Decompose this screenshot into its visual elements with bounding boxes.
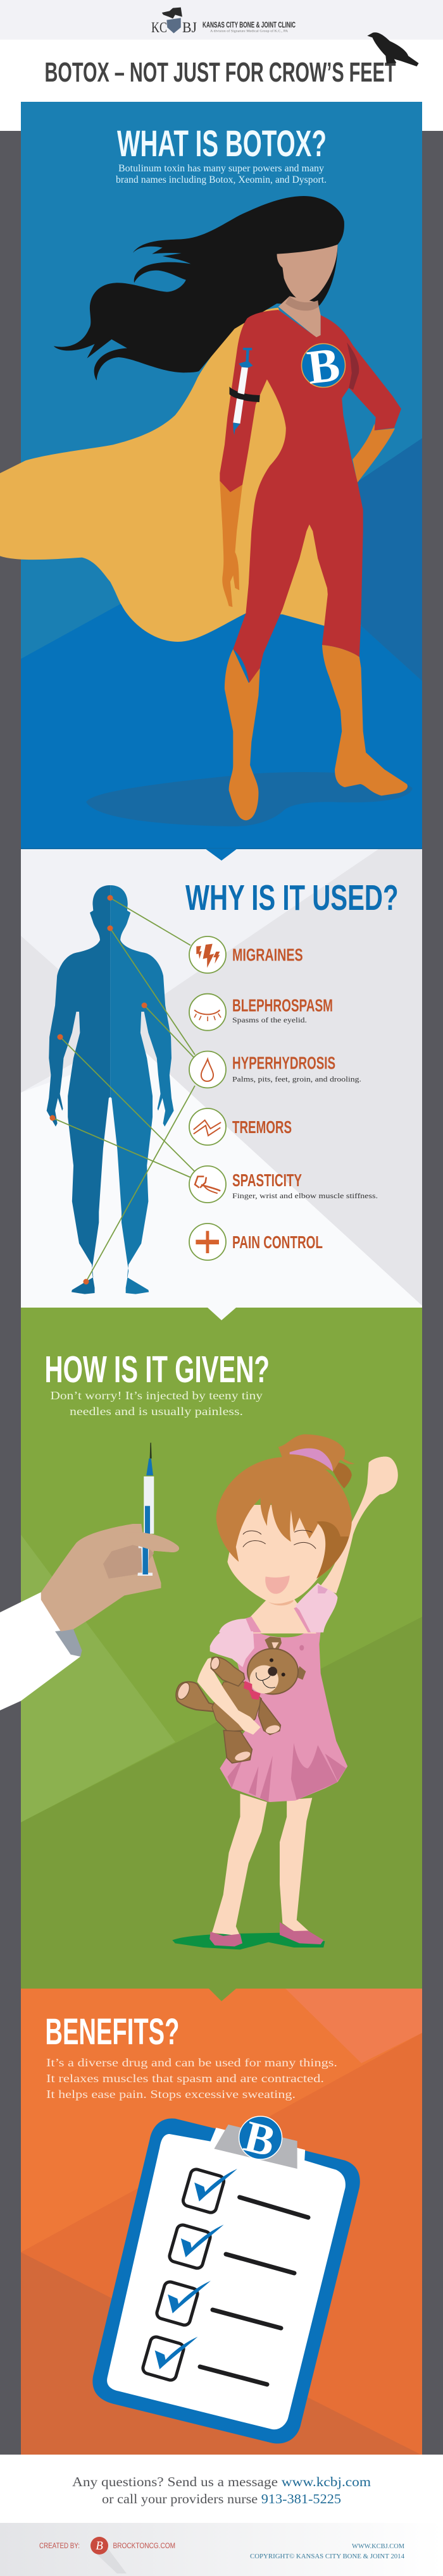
checkbox row 2	[168, 2224, 294, 2273]
brockton url: BROCKTONCG.COM	[113, 2541, 175, 2550]
bear upper arm	[211, 1657, 245, 1686]
bear top ear	[265, 1636, 282, 1652]
clip	[214, 2125, 297, 2169]
superhero figure	[0, 196, 413, 826]
panel: how is it given	[21, 1308, 422, 1989]
icon: KCBJ logo: KC	[151, 20, 167, 35]
icon: tremor zigzag	[194, 1120, 221, 1136]
arrow: green pointer	[209, 1989, 236, 2001]
bear torso	[212, 1682, 261, 1731]
text: injection: Don’t worry! It’s injected by teeny tiny	[51, 1389, 263, 1402]
icon: brockton logo: B	[96, 2539, 103, 2553]
text: injection	[51, 1389, 263, 1418]
neck	[278, 296, 321, 338]
clinic name: KANSAS CITY BONE & JOINT CLINIC	[203, 20, 296, 29]
body target dots	[49, 895, 147, 1285]
heading: what is botox: WHAT IS BOTOX?	[117, 123, 327, 164]
teddy bear	[175, 1636, 306, 1763]
head	[216, 1434, 354, 1604]
left glove	[220, 481, 242, 607]
syringe	[137, 1443, 154, 1576]
dress	[220, 1631, 347, 1802]
red suit	[220, 310, 401, 683]
contact line 1: Any questions? Send us a message www.kcbj.com	[72, 2474, 371, 2489]
checkbox row 3	[156, 2281, 281, 2328]
checkbox row 1	[182, 2168, 308, 2217]
clinic division: A division of Signature Medical Group of K.C., PA	[210, 29, 288, 33]
neck shadow	[285, 296, 319, 310]
condition labels: MIGRAINES	[232, 945, 303, 964]
condition labels: PAIN CONTROL	[232, 1232, 323, 1252]
icon: brockton logo	[90, 2537, 127, 2573]
bear nose	[268, 1667, 277, 1676]
bear bow	[244, 1681, 261, 1700]
doctor coat	[0, 1592, 80, 1710]
copyright: COPYRIGHT© KANSAS CITY BONE & JOINT 2014	[250, 2553, 405, 2560]
ground shadow	[86, 772, 413, 826]
checkbox row 4	[142, 2336, 267, 2384]
text: benefits: It helps ease pain. Stops excessive sweating.	[46, 2088, 296, 2101]
icon circles	[189, 936, 226, 1260]
icon: sweat drop	[201, 1059, 213, 1081]
legs	[212, 1794, 312, 1936]
bear side ear	[296, 1666, 306, 1680]
arrow: blue pointer	[205, 849, 237, 861]
icon: arm syringe	[230, 348, 253, 435]
icon: pain plus	[196, 1231, 219, 1253]
icon: KCBJ logo	[151, 8, 197, 35]
right boot	[322, 645, 408, 795]
condition labels: HYPERHYDROSIS	[232, 1053, 335, 1073]
heading: benefits: BENEFITS?	[45, 2011, 179, 2052]
bear eyes	[270, 1659, 285, 1676]
panel: why is it used	[21, 848, 422, 1308]
icon: B chest badge: B	[304, 338, 342, 395]
icon: KCBJ logo: BJ	[182, 20, 197, 35]
icon: B clip badge: B	[239, 2112, 280, 2166]
condition descriptions: Palms, pits, feet, groin, and drooling.	[232, 1075, 361, 1084]
header band with logo	[0, 0, 443, 40]
icon: migraine bolts	[196, 944, 220, 968]
condition descriptions: Finger, wrist and elbow muscle stiffness.	[232, 1191, 378, 1200]
text: injection: needles and is usually painless.	[70, 1405, 243, 1418]
bear left arm	[176, 1682, 216, 1712]
girl arm and hand	[197, 1658, 261, 1734]
left boot	[225, 649, 260, 820]
condition descriptions	[232, 1015, 378, 1200]
bear lower leg	[223, 1731, 252, 1763]
condition labels: BLEPHROSPASM	[232, 995, 333, 1015]
left sleeve	[210, 1631, 254, 1667]
bear top ear inner	[271, 1642, 279, 1650]
clipboard board	[92, 2118, 360, 2443]
armband	[230, 387, 260, 402]
text: botox intro: Botulinum toxin has many super powers and many	[118, 163, 324, 174]
bear mouth	[256, 1672, 275, 1688]
bear muzzle	[250, 1665, 278, 1693]
condition labels	[232, 945, 335, 1252]
upper body	[219, 1583, 337, 1633]
heading: how is it given: HOW IS IT GIVEN?	[44, 1349, 270, 1390]
created by: CREATED BY:	[39, 2541, 80, 2550]
condition labels: TREMORS	[232, 1117, 292, 1137]
connector lines	[53, 898, 195, 1282]
raised arm	[319, 1457, 398, 1593]
contact line 2: or call your providers nurse 913-381-5225	[102, 2491, 341, 2506]
text: benefits: It’s a diverse drug and can be used for many things.	[46, 2056, 337, 2069]
arrow: white pointer	[208, 1308, 236, 1320]
right glove	[353, 424, 395, 482]
panel: benefits	[21, 1989, 422, 2455]
clipboard paper	[107, 2128, 346, 2429]
contact section	[0, 2455, 443, 2523]
grass shadow	[172, 1933, 325, 1949]
hair	[54, 196, 344, 381]
icon: locking pliers	[195, 1177, 220, 1193]
panel: what is botox	[21, 102, 422, 849]
condition descriptions: Spasms of the eyelid.	[232, 1015, 307, 1024]
icon: crow	[367, 32, 419, 66]
cape	[0, 308, 339, 642]
icon: eyelid	[194, 1010, 221, 1021]
clipboard	[92, 2112, 360, 2443]
shoes	[209, 1922, 323, 1946]
suit shading	[347, 343, 359, 390]
footer band	[0, 2523, 443, 2576]
text: benefits	[46, 2056, 337, 2101]
doctor hand	[41, 1443, 179, 1631]
bear right leg	[258, 1699, 280, 1734]
girl with teddy bear	[172, 1434, 398, 1949]
text: benefits: It relaxes muscles that spasm and are contracted.	[46, 2072, 324, 2085]
face	[277, 245, 337, 302]
text: botox intro: brand names including Botox, Xeomin, and Dysport.	[116, 175, 327, 185]
condition labels: SPASTICITY	[232, 1170, 302, 1190]
coat cuff	[55, 1629, 82, 1657]
text: botox intro	[116, 163, 327, 185]
footer website: WWW.KCBJ.COM	[352, 2543, 405, 2550]
body silhouette	[47, 885, 174, 1294]
bear head	[247, 1648, 298, 1694]
